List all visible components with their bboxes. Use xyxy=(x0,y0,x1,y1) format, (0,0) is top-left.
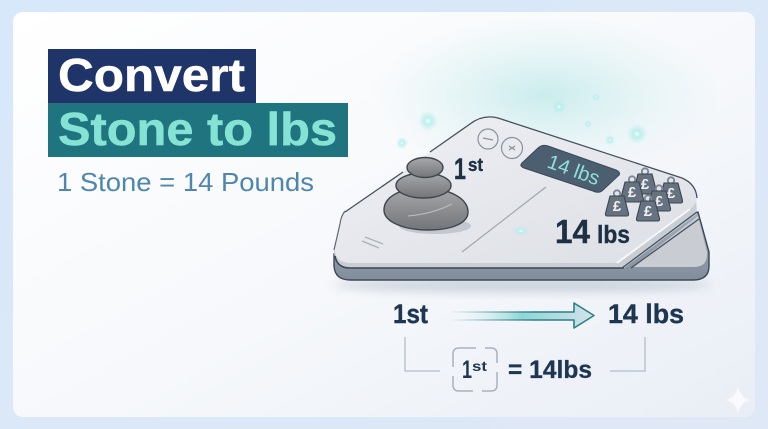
centre fold line xyxy=(462,187,546,252)
stone stack xyxy=(384,158,471,234)
conversion row xyxy=(393,299,684,329)
weights pile: £ xyxy=(655,193,664,210)
heading: Convert: Convert xyxy=(58,49,245,101)
weights pile: £ xyxy=(641,176,650,193)
base lip xyxy=(334,198,697,268)
label: 1st: 1st xyxy=(393,299,428,329)
1st box xyxy=(453,348,497,391)
base lip line xyxy=(335,256,624,268)
display screen: 14 lbs xyxy=(544,151,603,190)
heading: Stone to lbs: Stone to lbs xyxy=(58,103,337,155)
scale top surface xyxy=(335,117,697,263)
right wedge xyxy=(632,216,707,267)
label: 1st on scale xyxy=(454,153,483,186)
weights pile: £ xyxy=(613,198,622,215)
scale base xyxy=(334,212,709,280)
scale illustration xyxy=(334,117,709,280)
arrow xyxy=(450,303,594,328)
icon: corner sparkle xyxy=(725,386,751,414)
label: 14 lbs on scale: lbs xyxy=(597,221,630,249)
left marks xyxy=(362,237,383,248)
label: 14 lbs: 14 lbs xyxy=(608,299,684,329)
left bracket xyxy=(405,337,440,371)
subtitle: 1 Stone = 14 Pounds xyxy=(57,167,314,197)
sparkles xyxy=(396,93,647,149)
weights pile: £ xyxy=(628,184,637,201)
right bracket xyxy=(610,337,645,371)
label: 1st on scale: 1 xyxy=(454,153,466,186)
glow dot on scale xyxy=(512,226,530,236)
glow behind scale xyxy=(370,15,720,175)
1st box: st xyxy=(472,358,487,374)
1st box: 1 xyxy=(462,356,472,384)
title block xyxy=(48,49,348,197)
formula row xyxy=(405,337,645,391)
scale shadow xyxy=(332,278,712,292)
label: 14 lbs on scale: 14 xyxy=(555,213,591,250)
weights pile: £ xyxy=(644,203,653,220)
equation text: = 14lbs xyxy=(508,356,592,384)
minus button xyxy=(478,129,498,149)
label: 1st on scale: st xyxy=(468,155,483,175)
right edge highlight and stripes xyxy=(617,209,690,263)
label: 14 lbs on scale xyxy=(555,213,630,250)
display screen xyxy=(521,145,620,192)
plus button xyxy=(502,138,522,158)
weights pile: £ xyxy=(667,185,676,202)
weights pile xyxy=(605,168,683,221)
